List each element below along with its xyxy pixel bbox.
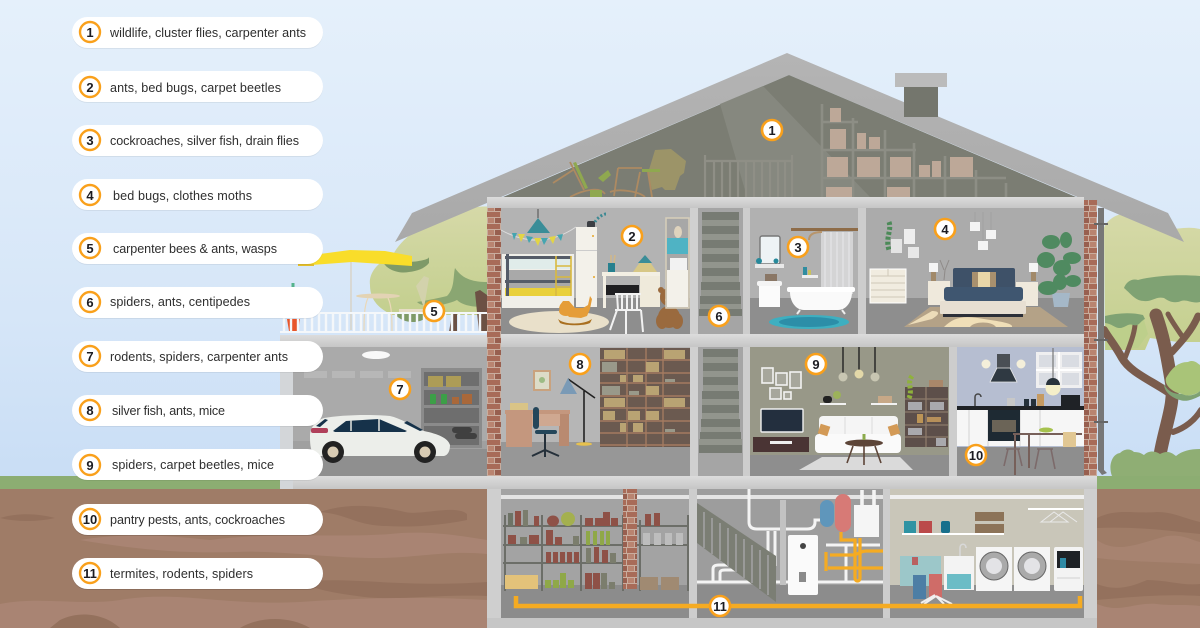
legend item 10 bbox=[72, 504, 323, 536]
badge 8 bbox=[570, 354, 590, 374]
legend item 9: 9 bbox=[86, 458, 94, 473]
badge 11: 11 bbox=[713, 599, 727, 614]
wall shelf with plant bbox=[820, 391, 897, 405]
legend item 5: carpenter bees & ants, wasps bbox=[113, 242, 277, 256]
teddy bear bbox=[656, 287, 683, 329]
badge 5: 5 bbox=[430, 304, 438, 319]
oven bbox=[988, 410, 1020, 441]
badge 8: 8 bbox=[576, 357, 584, 372]
panel: room 8 study bbox=[501, 347, 690, 476]
bookcase bbox=[905, 380, 948, 447]
tree: right background tree bbox=[1104, 213, 1200, 455]
expansion tanks bbox=[820, 494, 851, 532]
badge 1 bbox=[762, 120, 782, 140]
legend item 11: 11 bbox=[83, 566, 97, 581]
bunk bed bbox=[502, 254, 574, 308]
garage wall vents bbox=[304, 371, 411, 378]
gray riser pipe bbox=[780, 500, 786, 585]
utility sink bbox=[944, 544, 974, 590]
badge 10: 10 bbox=[969, 448, 983, 463]
laundry basket and clothes bbox=[900, 556, 942, 599]
window bbox=[1036, 352, 1082, 388]
legend item 3 bbox=[72, 125, 323, 157]
desk lamp and cup bbox=[608, 255, 657, 272]
plant on wardrobe bbox=[587, 214, 606, 228]
roof bbox=[395, 53, 1184, 242]
legend item 7 bbox=[72, 341, 323, 373]
ground: soil bbox=[0, 489, 1200, 628]
brick column bbox=[623, 489, 637, 589]
floor slabs and columns bbox=[280, 197, 1097, 489]
rug bbox=[799, 457, 913, 470]
legend item 7: 7 bbox=[86, 349, 94, 364]
shelf unit bbox=[666, 218, 689, 308]
washing machines bbox=[976, 547, 1050, 591]
panel: room 3 bathroom bbox=[750, 208, 858, 334]
badge 2: 2 bbox=[628, 229, 636, 244]
storage shelf bbox=[421, 368, 482, 448]
coffee table bbox=[845, 434, 883, 465]
badge 7 bbox=[390, 379, 410, 399]
attic stored furniture bbox=[553, 149, 686, 197]
badge 2 bbox=[622, 226, 642, 246]
television bbox=[761, 409, 803, 432]
badge 9: 9 bbox=[812, 357, 820, 372]
panel: room 10 kitchen bbox=[957, 347, 1084, 476]
laundry shelf bbox=[902, 512, 1004, 535]
badge 11 bbox=[710, 596, 730, 616]
attic shelves bbox=[822, 104, 1006, 197]
legend item 4: bed bugs, clothes moths bbox=[113, 189, 252, 203]
pendant lamps bbox=[838, 347, 880, 382]
badge 3: 3 bbox=[794, 240, 802, 255]
panel: balcony bbox=[280, 250, 487, 332]
legend item 2: ants, bed bugs, carpet beetles bbox=[110, 81, 281, 95]
panel: stairwell lower bbox=[698, 347, 743, 476]
basement storage room bbox=[501, 489, 883, 618]
badge 1: 1 bbox=[768, 123, 776, 138]
ceiling light bbox=[362, 351, 390, 359]
orange foundation line bbox=[516, 596, 1080, 606]
dining table bbox=[1013, 428, 1082, 475]
legend item 6: 6 bbox=[86, 295, 94, 310]
rocking toy dog bbox=[558, 296, 592, 325]
badge 7: 7 bbox=[396, 382, 404, 397]
legend item 10: pantry pests, ants, cockroaches bbox=[110, 513, 285, 527]
legend item 1: wildlife, cluster flies, carpenter ants bbox=[109, 26, 306, 40]
legend item 11: termites, rodents, spiders bbox=[110, 567, 253, 581]
attic light beam bbox=[720, 86, 870, 197]
panel: room 4 master bedroom bbox=[866, 208, 1084, 334]
legend item 11 bbox=[72, 558, 323, 590]
small bath shelf bbox=[802, 267, 818, 278]
sink cabinet bbox=[757, 274, 782, 307]
legend item 4 bbox=[72, 179, 323, 211]
patio table bbox=[356, 294, 400, 332]
legend item 2 bbox=[72, 71, 323, 103]
monstera plant bbox=[1037, 232, 1081, 307]
storage cabinet bbox=[1054, 547, 1083, 591]
desk bbox=[602, 272, 660, 308]
bath mat bbox=[769, 315, 849, 329]
badge 9 bbox=[806, 354, 826, 374]
badge 3 bbox=[788, 237, 808, 257]
desk bbox=[505, 403, 570, 447]
badge 5 bbox=[424, 301, 444, 321]
panel: room 9 living room bbox=[750, 347, 949, 476]
bed bbox=[940, 268, 1026, 317]
legend item 3: cockroaches, silver fish, drain flies bbox=[110, 134, 299, 148]
chimney bbox=[895, 73, 947, 117]
panel: stairwell upper bbox=[698, 208, 743, 334]
bathtub bbox=[787, 287, 855, 314]
panel: basement bbox=[487, 489, 1097, 628]
nightstands and lamps bbox=[928, 260, 1038, 306]
badge 4 bbox=[935, 219, 955, 239]
sofa bbox=[815, 416, 901, 453]
legend item 9: spiders, carpet beetles, mice bbox=[112, 458, 274, 472]
drying rack legs bbox=[921, 595, 952, 604]
tree: left background tree bbox=[370, 207, 498, 332]
white pipes bbox=[697, 489, 883, 582]
counter and cabinets bbox=[957, 406, 1084, 446]
floor lamp bbox=[560, 378, 595, 446]
pantry jars and bottles bbox=[505, 510, 683, 590]
bookcase bbox=[600, 348, 690, 447]
pendant lamps bbox=[970, 212, 996, 250]
panel: garage bbox=[280, 335, 487, 489]
wall frames bbox=[762, 368, 801, 399]
badge 6: 6 bbox=[715, 309, 723, 324]
umbrella bbox=[298, 250, 412, 330]
legend item 6 bbox=[72, 287, 323, 319]
rug bbox=[904, 307, 1068, 327]
attic railing bbox=[705, 155, 792, 197]
legend item 5 bbox=[72, 233, 323, 265]
dresser bbox=[870, 269, 906, 303]
water heater bbox=[788, 535, 818, 595]
legend item 2: 2 bbox=[86, 80, 94, 95]
room number badges bbox=[390, 120, 986, 616]
legend item 3: 3 bbox=[86, 133, 94, 148]
stools bbox=[1004, 449, 1055, 469]
pendant lamp and bunting bbox=[501, 209, 576, 246]
legend item 6: spiders, ants, centipedes bbox=[110, 295, 250, 309]
white chair bbox=[610, 294, 643, 340]
car bbox=[310, 415, 450, 463]
staircase railing bbox=[697, 503, 776, 602]
ground: grass strip bbox=[0, 449, 1200, 489]
orange pipes bbox=[826, 532, 883, 581]
clothes hangers bbox=[1028, 509, 1083, 522]
badge 4: 4 bbox=[941, 222, 949, 237]
legend item 1 bbox=[72, 17, 323, 49]
pantry shelves bbox=[503, 515, 688, 591]
legend item 7: rodents, spiders, carpenter ants bbox=[110, 350, 288, 364]
office chair bbox=[532, 407, 559, 457]
columns bbox=[689, 489, 890, 618]
panel: attic bbox=[503, 75, 1076, 197]
basement laundry room bbox=[890, 489, 1084, 618]
pendant lamp bbox=[1046, 348, 1060, 396]
legend item 1: 1 bbox=[86, 25, 94, 40]
rug bbox=[509, 311, 609, 333]
drainpipe bbox=[1094, 208, 1108, 475]
wall plant and frames bbox=[888, 222, 919, 258]
tv stand bbox=[753, 437, 809, 452]
picture frame bbox=[533, 370, 551, 391]
railing bbox=[280, 313, 487, 332]
shower curtain and rod bbox=[791, 228, 858, 294]
legend item 8: 8 bbox=[86, 403, 94, 418]
legend item 4: 4 bbox=[86, 188, 94, 203]
wall lamps bbox=[982, 360, 1026, 368]
legend item 9 bbox=[72, 449, 323, 481]
badge 10 bbox=[966, 445, 986, 465]
badge 6 bbox=[709, 306, 729, 326]
legend item 8: silver fish, ants, mice bbox=[112, 404, 225, 418]
legend list bbox=[72, 17, 323, 590]
legend item 8 bbox=[72, 395, 323, 427]
legend item 10: 10 bbox=[83, 512, 97, 527]
legend item 5: 5 bbox=[86, 241, 94, 256]
panel: room 2 kids bedroom bbox=[501, 208, 690, 340]
flower pot bbox=[287, 283, 300, 331]
range hood bbox=[990, 354, 1017, 382]
boiler bbox=[854, 490, 879, 537]
trailing plant bbox=[908, 376, 912, 400]
patio chair bbox=[399, 276, 429, 312]
mirror and shelf bbox=[755, 236, 784, 268]
basement utility room bbox=[697, 489, 883, 618]
microwave and counter items bbox=[975, 394, 1080, 406]
house shell: walls and slabs bbox=[280, 197, 1097, 489]
wardrobe bbox=[576, 227, 597, 307]
